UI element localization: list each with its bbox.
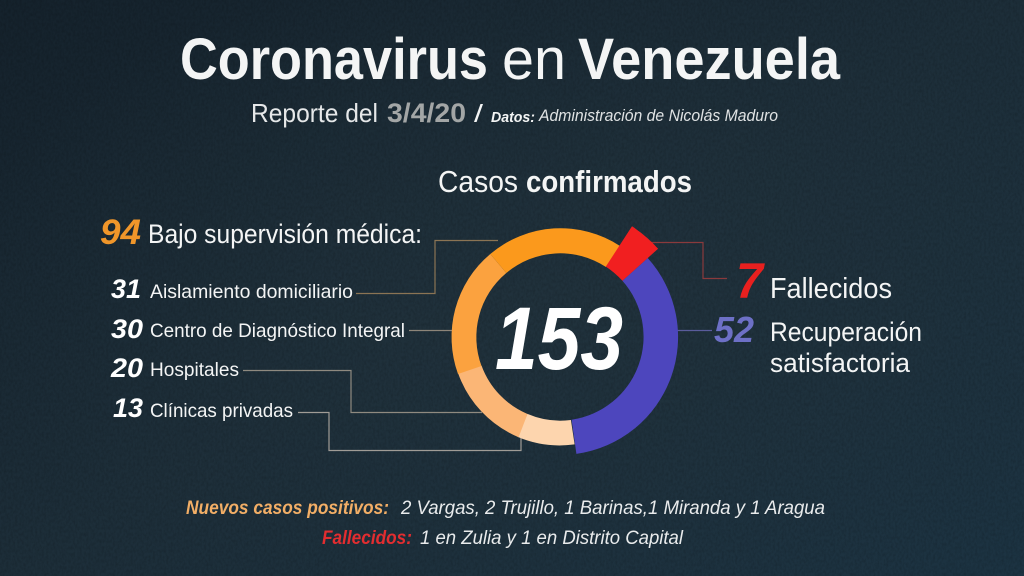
subtitle: report date and source: Datos: [491, 109, 535, 126]
heading: casos confirmados [438, 164, 692, 199]
subtitle: report date and source [251, 98, 778, 128]
item: centro de diagnóstico integral: 30 [111, 314, 143, 344]
item: hospitales: 20 [110, 353, 143, 383]
item: hospitales: Hospitales [150, 359, 239, 381]
item: aislamiento domiciliario: Aislamiento domiciliario [150, 281, 353, 303]
subtitle: report date and source: Administración de Nicolás Maduro [538, 107, 778, 125]
heading: casos confirmados: Casos [438, 164, 518, 199]
right item: fallecidos: 7 [736, 253, 765, 309]
segment: clínicas privadas [518, 414, 575, 445]
connector lines [243, 240, 727, 450]
footer: fallecidos: 1 en Zulia y 1 en Distrito Capital [420, 528, 684, 549]
item: centro de diagnóstico integral [111, 314, 405, 344]
segment: fallecidos [606, 226, 658, 281]
segment: centro de diagnóstico [452, 254, 506, 374]
footer: nuevos casos positivos [186, 498, 825, 519]
segment: hospitales [458, 366, 528, 437]
right item: fallecidos: Fallecidos [770, 273, 892, 305]
segment: aislamiento domiciliario [490, 228, 620, 273]
subtitle: report date and source: Reporte del [251, 98, 378, 128]
item: hospitales [110, 353, 239, 383]
title [180, 27, 841, 92]
right item: recuperación satisfactoria: satisfactoria [770, 348, 911, 378]
right item: recuperación satisfactoria: Recuperación [770, 317, 922, 347]
left group heading [100, 213, 422, 252]
footer: nuevos casos positivos: 2 Vargas, 2 Trujillo, 1 Barinas,1 Miranda y 1 Aragua [400, 498, 825, 519]
heading: casos confirmados: confirmados [526, 164, 692, 199]
segment: recuperados [572, 258, 678, 454]
footer: nuevos casos positivos: Nuevos casos positivos: [186, 498, 389, 519]
left group heading: 94 [100, 213, 141, 252]
title: en [502, 27, 566, 92]
donut chart [452, 226, 678, 454]
item: aislamiento domiciliario: 31 [111, 274, 141, 304]
footer: fallecidos: Fallecidos: [322, 528, 412, 549]
right item: recuperación satisfactoria [714, 309, 922, 378]
item: aislamiento domiciliario [111, 274, 353, 304]
item: centro de diagnóstico integral: Centro de Diagnóstico Integral [150, 320, 405, 342]
right item: recuperación satisfactoria: 52 [714, 309, 754, 350]
subtitle: report date and source: / [474, 100, 483, 128]
right item: fallecidos [736, 253, 892, 309]
left group heading: Bajo supervisión médica: [148, 219, 422, 249]
item: clínicas privadas [113, 393, 293, 423]
subtitle: report date and source: 3/4/20 [387, 98, 466, 128]
total number: 153 [495, 288, 623, 388]
item: clínicas privadas: Clínicas privadas [150, 400, 293, 422]
title: Coronavirus [180, 27, 488, 92]
title: Venezuela [578, 27, 841, 92]
item: clínicas privadas: 13 [113, 393, 143, 423]
